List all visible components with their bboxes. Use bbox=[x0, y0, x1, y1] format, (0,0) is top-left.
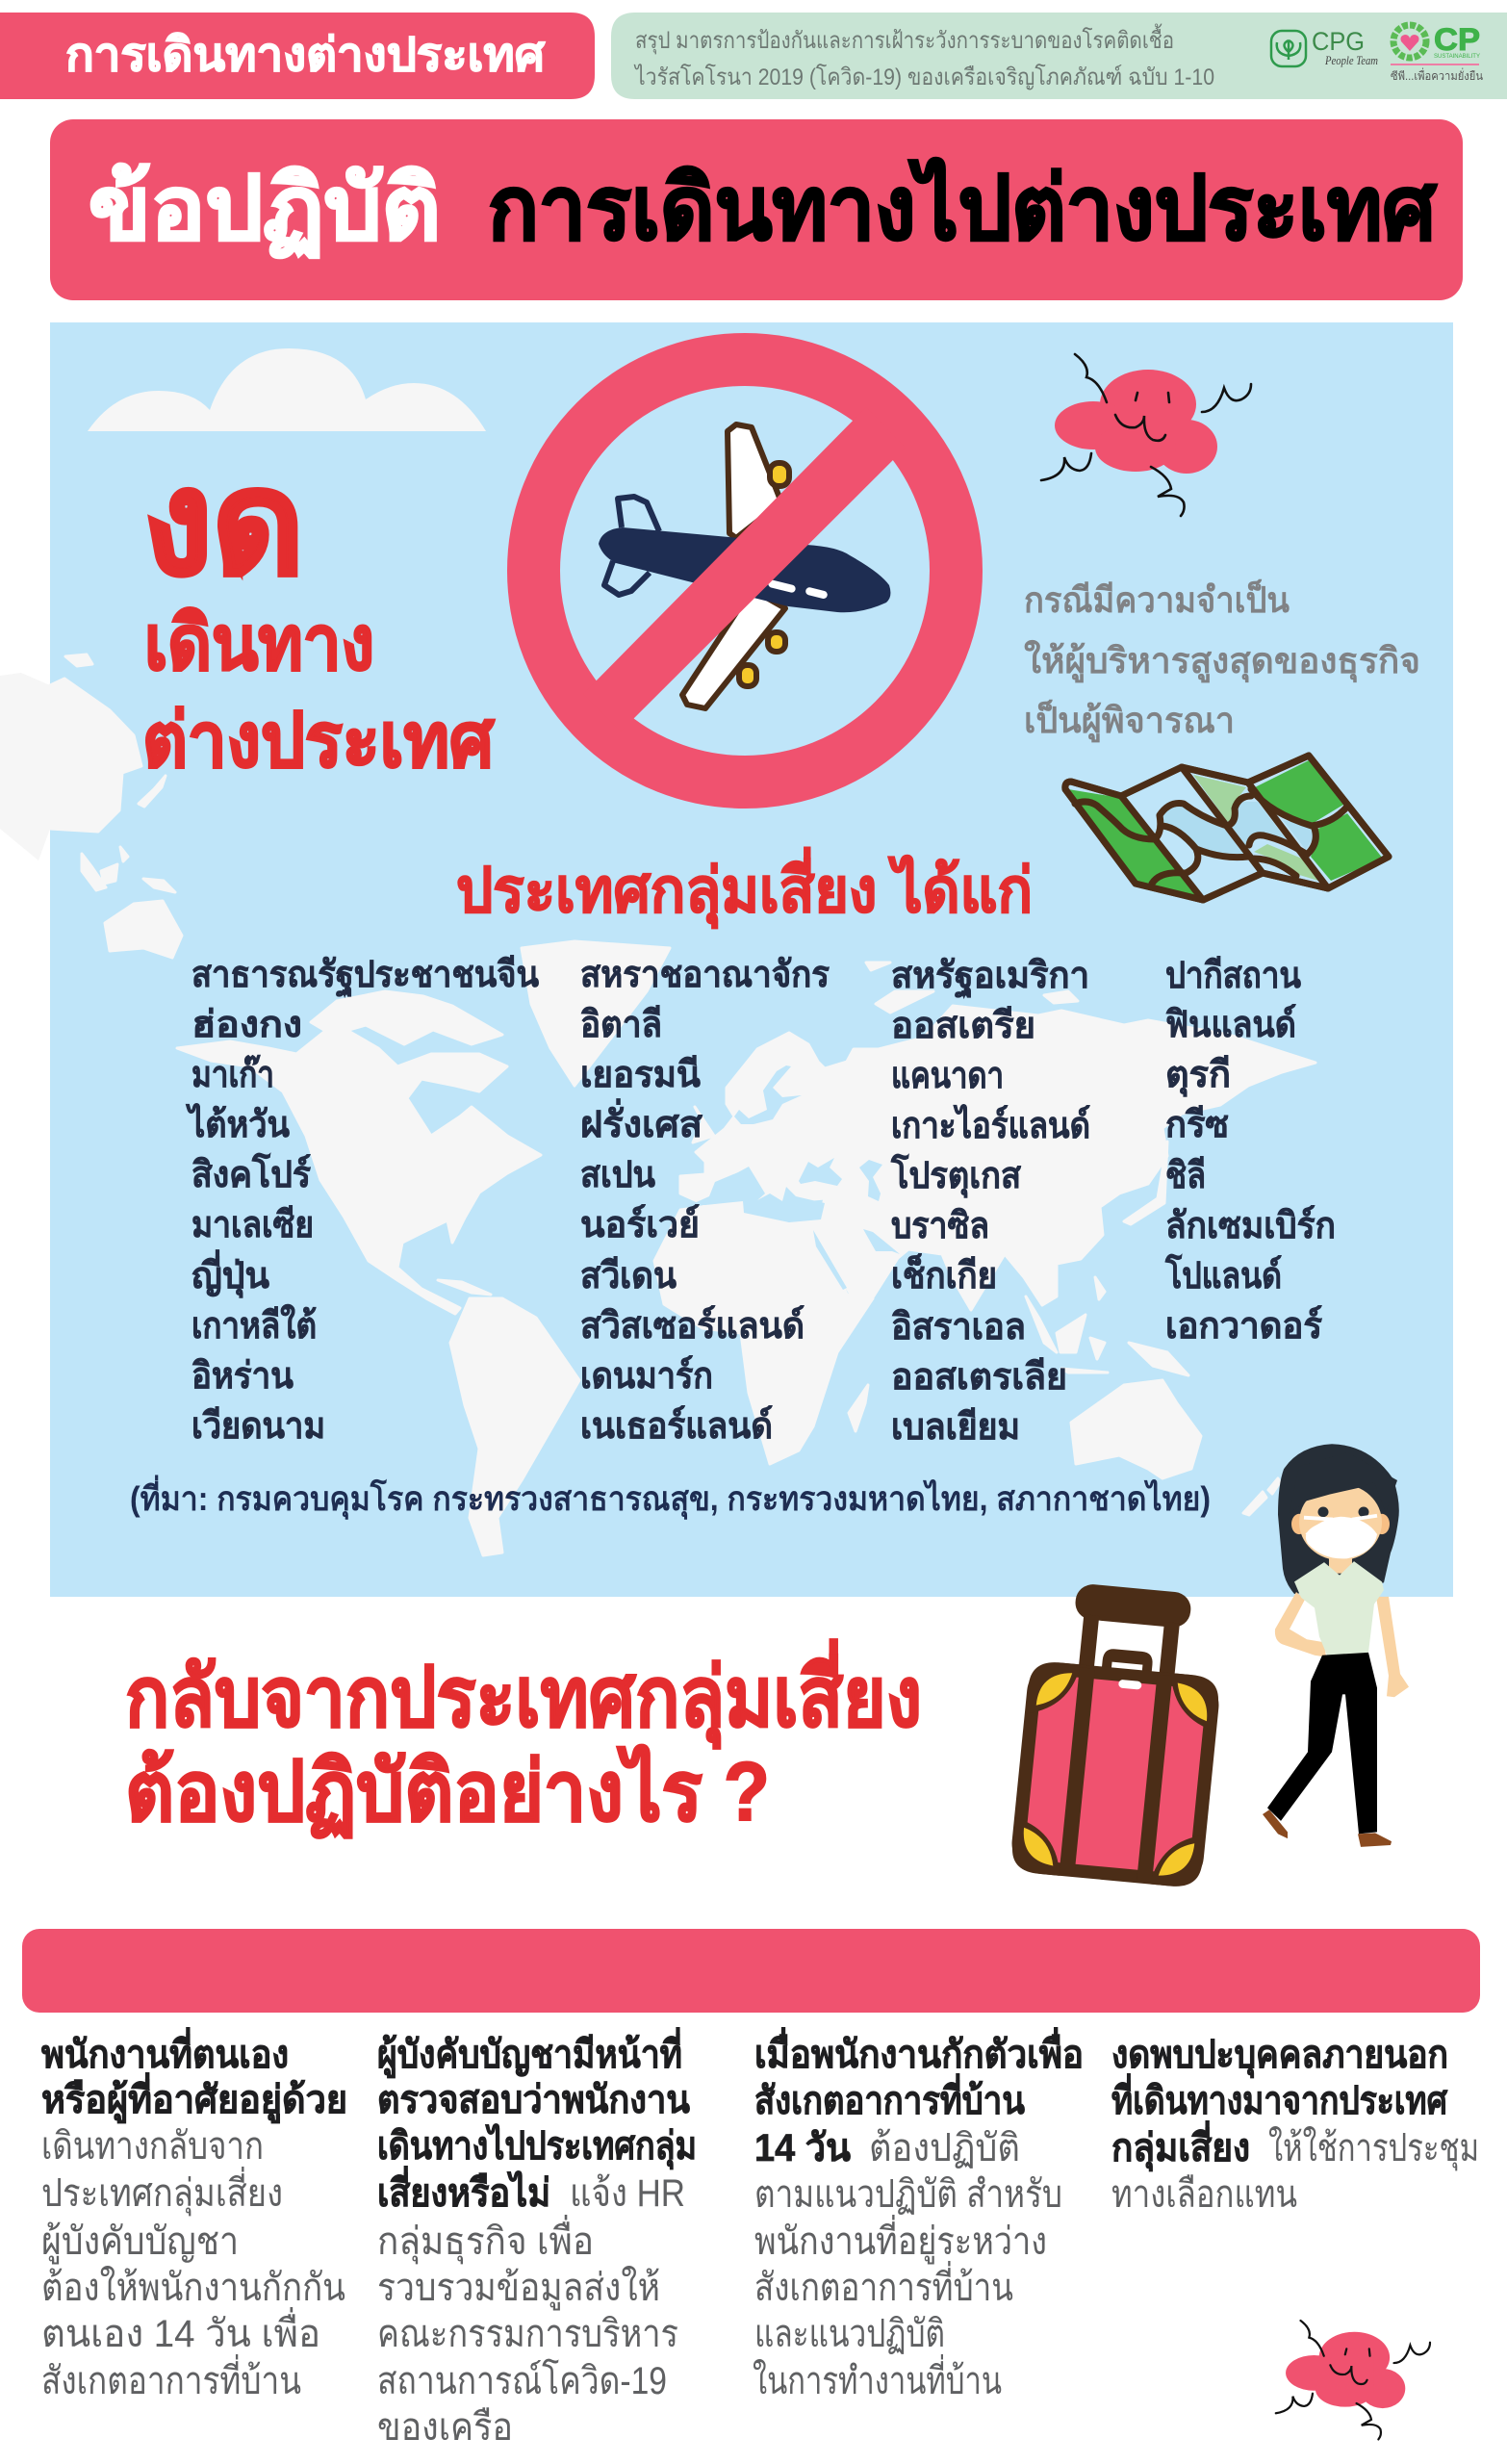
country column 1: เกาหลีใต้ bbox=[192, 1304, 317, 1347]
heading: no travel: ต่างประเทศ bbox=[142, 698, 495, 783]
country column 1: ไต้หวัน bbox=[185, 1103, 290, 1145]
text column 3: ในการทำงานที่บ้าน bbox=[753, 2354, 1002, 2402]
world map wrap fragment left of panel bbox=[0, 673, 50, 860]
logo: CP sustainability: SUSTAINABILITY bbox=[1434, 54, 1480, 60]
text column 4 bbox=[1111, 2034, 1479, 2216]
woman wearing a mask bbox=[1263, 1444, 1409, 1847]
country column 3: เช็กเกีย bbox=[891, 1253, 997, 1296]
exception note bbox=[1024, 578, 1420, 743]
heading: returning question bbox=[125, 1638, 922, 1839]
panel: no travel and risk countries bbox=[50, 322, 1453, 1597]
text column 1: ต้องให้พนักงานกักกัน bbox=[41, 2265, 345, 2309]
text column 3: ต้องปฏิบัติ bbox=[869, 2127, 1020, 2169]
text column 4: ที่เดินทางมาจากประเทศ bbox=[1111, 2073, 1448, 2122]
country column 1: อิหร่าน bbox=[192, 1356, 294, 1397]
icon: folded map bbox=[1065, 756, 1389, 900]
exception note: ให้ผู้บริหารสูงสุดของธุรกิจ bbox=[1024, 639, 1420, 683]
country column 1 bbox=[185, 955, 539, 1447]
text column 2: รวบรวมข้อมูลส่งให้ bbox=[377, 2265, 660, 2310]
heading: no travel: เดินทาง bbox=[144, 601, 374, 685]
text column 3 bbox=[753, 2027, 1084, 2402]
text column 2: คณะกรรมการบริหาร bbox=[377, 2313, 678, 2355]
summary text: ไวรัสโคโรนา 2019 (โควิด-19) ของเครือเจริญโภคภัณฑ์ ฉบับ 1-10 bbox=[633, 64, 1214, 90]
heading: returning question: ต้องปฏิบัติอย่างไร ? bbox=[125, 1744, 770, 1839]
text column 2: ของเครือ bbox=[377, 2406, 513, 2449]
country column 3: ออสเตรเลีย bbox=[891, 1357, 1067, 1398]
text column 1: สังเกตอาการที่บ้าน bbox=[41, 2354, 301, 2402]
country column 1: ญี่ปุ่น bbox=[192, 1249, 269, 1298]
cloud bbox=[88, 348, 486, 431]
text column 2: เสี่ยงหรือไม่ bbox=[377, 2166, 550, 2215]
text column 1 bbox=[41, 2027, 347, 2402]
country column 4: ปากีสถาน bbox=[1165, 956, 1301, 996]
country column 3: บราซิล bbox=[891, 1206, 989, 1246]
header strip: summary and logos bbox=[611, 13, 1507, 99]
country column 3: อิสราเอล bbox=[891, 1307, 1026, 1348]
no-entry ring bbox=[533, 360, 957, 782]
country column 2: อิตาลี bbox=[580, 1005, 662, 1045]
country column 1: ฮ่องกง bbox=[192, 1005, 302, 1045]
source note: (ที่มา: กรมควบคุมโรค กระทรวงสาธารณสุข, กระทรวงมหาดไทย, สภากาชาดไทย) bbox=[130, 1475, 1211, 1520]
text column 1: หรือผู้ที่อาศัยอยู่ด้วย bbox=[41, 2072, 347, 2123]
header tab: section name bbox=[0, 13, 595, 99]
text column 3: สังเกตอาการที่บ้าน bbox=[754, 2261, 1013, 2309]
text column 2: แจ้ง HR bbox=[570, 2172, 685, 2215]
title: black part: การเดินทางไปต่างประเทศ bbox=[488, 158, 1438, 258]
country column 4: กรีซ bbox=[1165, 1105, 1229, 1145]
country column 2: สวีเดน bbox=[580, 1256, 677, 1296]
summary text: สรุป มาตรการป้องกันและการเฝ้าระวังการระบาดของโรคติดเชื้อ bbox=[635, 23, 1174, 55]
country column 2: นอร์เวย์ bbox=[580, 1204, 700, 1245]
country column 1: มาเลเซีย bbox=[192, 1205, 314, 1245]
prohibition sign with airplane bbox=[533, 360, 957, 782]
inland seas bbox=[690, 1065, 900, 1290]
text column 3: ตามแนวปฏิบัติ สำหรับ bbox=[754, 2173, 1062, 2216]
virus character bbox=[1041, 354, 1251, 516]
title banner bbox=[50, 119, 1463, 300]
country column 1: สาธารณรัฐประชาชนจีน bbox=[192, 955, 539, 998]
exception note: เป็นผู้พิจารณา bbox=[1024, 698, 1235, 743]
logo: CPG People Team: People Team bbox=[1324, 53, 1378, 67]
country column 2: เยอรมนี bbox=[580, 1055, 701, 1095]
country column 4: โปแลนด์ bbox=[1164, 1253, 1282, 1296]
text column 3: และแนวปฏิบัติ bbox=[754, 2313, 945, 2355]
header tab: section name: การเดินทางต่างประเทศ bbox=[65, 30, 547, 81]
country column 1: มาเก๊า bbox=[192, 1055, 274, 1095]
country column 3: เบลเยียม bbox=[891, 1407, 1020, 1448]
text column 2: เดินทางไปประเทศกลุ่ม bbox=[377, 2123, 697, 2170]
country column 2 bbox=[580, 955, 830, 1447]
country column 4: ชิลี bbox=[1165, 1156, 1206, 1196]
virus character small bbox=[1276, 2321, 1430, 2439]
world map bbox=[50, 654, 1315, 1555]
heading: no travel: งด bbox=[143, 442, 304, 603]
text column 1: ตนเอง 14 วัน เพื่อ bbox=[41, 2307, 320, 2355]
country column 2: สวิสเซอร์แลนด์ bbox=[580, 1305, 805, 1347]
logo: CP sustainability: CP bbox=[1434, 22, 1480, 57]
text column 3: พนักงานที่อยู่ระหว่าง bbox=[754, 2215, 1047, 2264]
country column 2: เดนมาร์ก bbox=[580, 1355, 713, 1397]
text column 4: ทางเลือกแทน bbox=[1111, 2173, 1297, 2216]
country column 1: สิงคโปร์ bbox=[192, 1152, 312, 1195]
icon: suitcase bbox=[1010, 1579, 1229, 1888]
text column 2: ตรวจสอบว่าพนักงาน bbox=[377, 2079, 690, 2121]
title: white part: ข้อปฏิบัติ bbox=[89, 160, 441, 259]
country column 4: ลักเซมเบิร์ก bbox=[1165, 1205, 1336, 1246]
text column 3: เมื่อพนักงานกักตัวเพื่อ bbox=[754, 2027, 1084, 2076]
text column 2 bbox=[377, 2027, 697, 2449]
text column 4: กลุ่มเสี่ยง bbox=[1111, 2120, 1250, 2172]
text column 3: 14 วัน bbox=[754, 2127, 851, 2169]
country column 2: สเปน bbox=[580, 1155, 655, 1195]
country column 2: สหราชอาณาจักร bbox=[580, 955, 830, 995]
logo: CP sustainability: ซีพี...เพื่อความยั่งยืน bbox=[1391, 67, 1483, 83]
logo: CPG People Team bbox=[1271, 27, 1378, 67]
country column 3: แคนาดา bbox=[891, 1056, 1004, 1096]
country column 3: ออสเตรีย bbox=[891, 1006, 1035, 1046]
heading: no travel bbox=[142, 442, 495, 783]
country column 2: เนเธอร์แลนด์ bbox=[580, 1405, 773, 1447]
country column 2: ฝรั่งเศส bbox=[580, 1098, 703, 1145]
text column 1: ผู้บังคับบัญชา bbox=[41, 2220, 239, 2264]
country column 4: ฟินแลนด์ bbox=[1165, 1004, 1296, 1045]
country column 3: เกาะไอร์แลนด์ bbox=[891, 1104, 1090, 1146]
country column 1: เวียดนาม bbox=[192, 1406, 325, 1447]
country column 3: โปรตุเกส bbox=[890, 1153, 1022, 1198]
text column 3: สังเกตอาการที่บ้าน bbox=[754, 2073, 1025, 2122]
text column 1: เดินทางกลับจาก bbox=[41, 2125, 264, 2168]
country column 3 bbox=[890, 956, 1090, 1448]
logo: CPG People Team: CPG bbox=[1312, 27, 1365, 56]
logo: CP sustainability bbox=[1391, 22, 1483, 83]
text column 1: ประเทศกลุ่มเสี่ยง bbox=[41, 2167, 283, 2217]
country column 4 bbox=[1164, 956, 1336, 1347]
summary text bbox=[633, 23, 1214, 90]
country column 4: เอกวาดอร์ bbox=[1165, 1305, 1323, 1347]
country column 3: สหรัฐอเมริกา bbox=[891, 956, 1089, 999]
text column 2: ผู้บังคับบัญชามีหน้าที่ bbox=[377, 2027, 682, 2078]
text column 2: สถานการณ์โควิด-19 bbox=[377, 2359, 667, 2402]
text column 1: พนักงานที่ตนเอง bbox=[41, 2027, 289, 2076]
heading: risk countries: ประเทศกลุ่มเสี่ยง ได้แก่ bbox=[456, 847, 1033, 929]
text column 4: งดพบปะบุคคลภายนอก bbox=[1111, 2034, 1448, 2079]
country column 4: ตุรกี bbox=[1165, 1055, 1231, 1097]
airplane bbox=[599, 424, 890, 708]
pink divider bar bbox=[22, 1929, 1480, 2013]
heading: returning question: กลับจากประเทศกลุ่มเสี่ยง bbox=[125, 1638, 922, 1749]
exception note: กรณีมีความจำเป็น bbox=[1024, 578, 1290, 620]
text column 2: กลุ่มธุรกิจ เพื่อ bbox=[377, 2215, 594, 2265]
